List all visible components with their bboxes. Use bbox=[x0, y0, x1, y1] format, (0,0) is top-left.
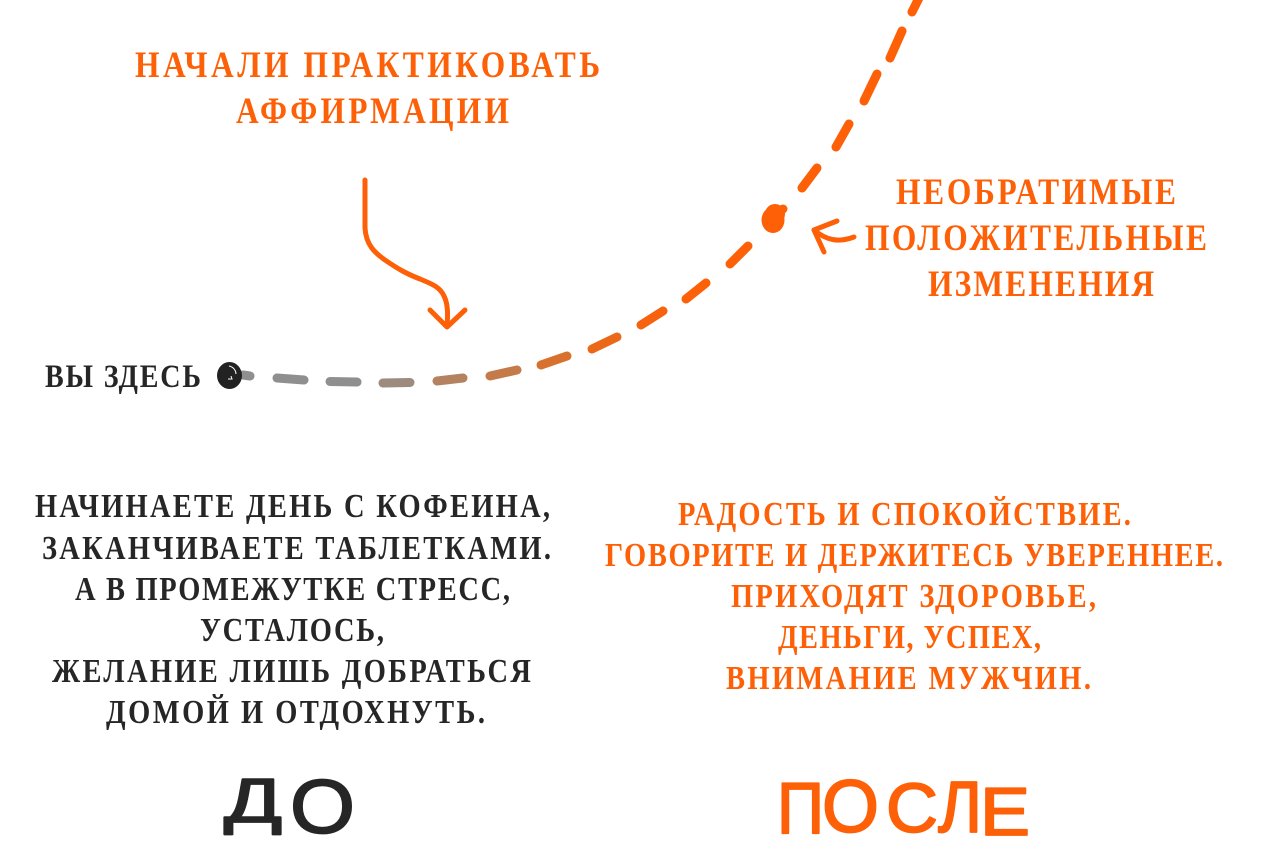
text block: after: ПРИХОДЯТ ЗДОРОВЬЕ, bbox=[731, 577, 1096, 615]
heading: after bbox=[777, 765, 1030, 850]
start point: black dot bbox=[217, 362, 242, 389]
callout: irreversible positive changes: ПОЛОЖИТЕЛЬНЫЕ bbox=[865, 218, 1207, 259]
callout: started practicing affirmations bbox=[135, 45, 600, 132]
text block: after: ДЕНЬГИ, УСПЕХ, bbox=[778, 618, 1041, 656]
heading: after: С bbox=[886, 769, 938, 847]
text block: before bbox=[35, 487, 551, 731]
text block: before: НАЧИНАЕТЕ ДЕНЬ С КОФЕИНА, bbox=[35, 487, 550, 525]
heading: after: О bbox=[822, 765, 879, 848]
text block: after: РАДОСТЬ И СПОКОЙСТВИЕ. bbox=[678, 495, 1131, 533]
arrow: down to the curve bbox=[365, 180, 465, 327]
text block: after: ГОВОРИТЕ И ДЕРЖИТЕСЬ УВЕРЕННЕЕ. bbox=[605, 536, 1223, 574]
heading: before bbox=[224, 765, 355, 850]
change point: orange dot bbox=[762, 204, 788, 233]
text block: after: ВНИМАНИЕ МУЖЧИН. bbox=[726, 659, 1091, 697]
text block: before: УСТАЛОСЬ, bbox=[200, 611, 384, 649]
dashed growth curve bbox=[243, 0, 920, 383]
heading: before: Д bbox=[224, 767, 282, 836]
text block: before: А В ПРОМЕЖУТКЕ СТРЕСС, bbox=[75, 570, 510, 608]
text block: before: ЖЕЛАНИЕ ЛИШЬ ДОБРАТЬСЯ bbox=[52, 652, 531, 690]
callout: started practicing affirmations: НАЧАЛИ ПРАКТИКОВАТЬ bbox=[135, 45, 600, 86]
callout: irreversible positive changes: ИЗМЕНЕНИЯ bbox=[928, 264, 1154, 305]
text block: after bbox=[605, 495, 1223, 697]
callout: started practicing affirmations: АФФИРМАЦИИ bbox=[236, 91, 509, 132]
text block: before: ДОМОЙ И ОТДОХНУТЬ. bbox=[106, 693, 485, 731]
heading: after: Е bbox=[980, 774, 1030, 850]
callout: irreversible positive changes bbox=[865, 172, 1207, 305]
arrow: pointing to the orange point bbox=[814, 221, 854, 252]
text block: before: ЗАКАНЧИВАЕТЕ ТАБЛЕТКАМИ. bbox=[42, 529, 551, 567]
heading: before: О bbox=[290, 765, 355, 850]
label: you are here: ВЫ ЗДЕСЬ bbox=[45, 358, 201, 395]
heading: after: П bbox=[777, 769, 824, 849]
heading: after: Л bbox=[938, 768, 982, 848]
callout: irreversible positive changes: НЕОБРАТИМЫЕ bbox=[896, 172, 1176, 213]
